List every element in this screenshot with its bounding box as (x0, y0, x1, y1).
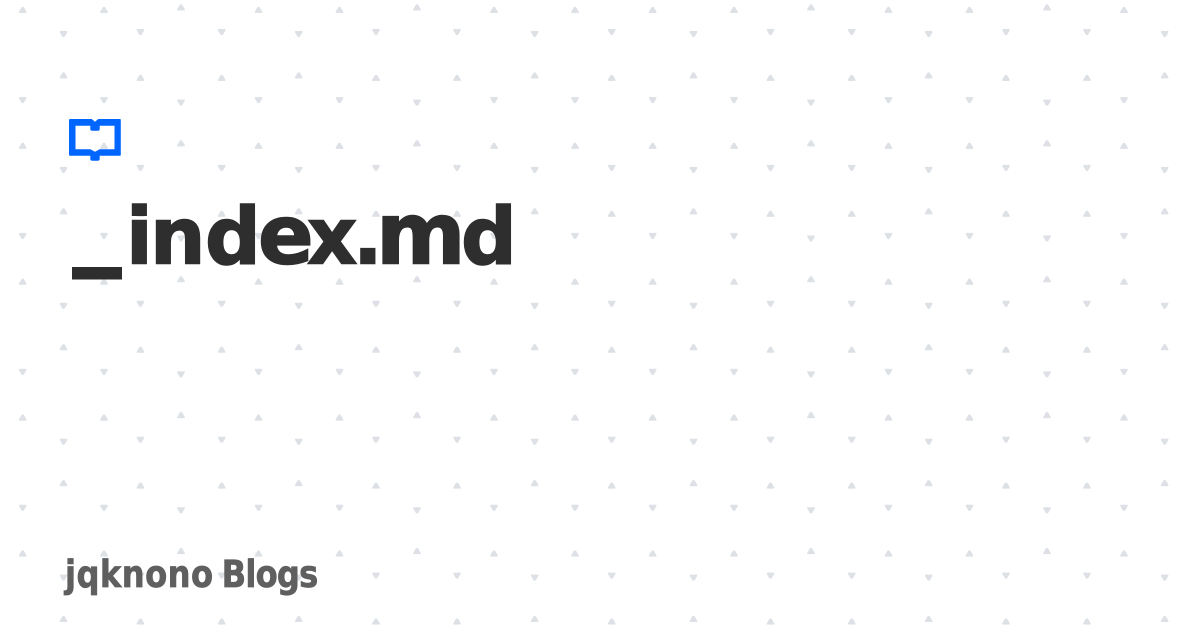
title: n (150, 192, 206, 282)
title: . (353, 192, 383, 282)
title: d (205, 192, 261, 282)
title: i (126, 192, 153, 282)
title: d (461, 192, 517, 282)
title: x (307, 192, 357, 282)
title: m (376, 184, 466, 284)
title: e (258, 188, 314, 283)
icon: open book (69, 119, 121, 161)
site name: Blogs (222, 554, 318, 597)
title: _ (74, 171, 120, 278)
site name: jqknono (63, 554, 225, 597)
